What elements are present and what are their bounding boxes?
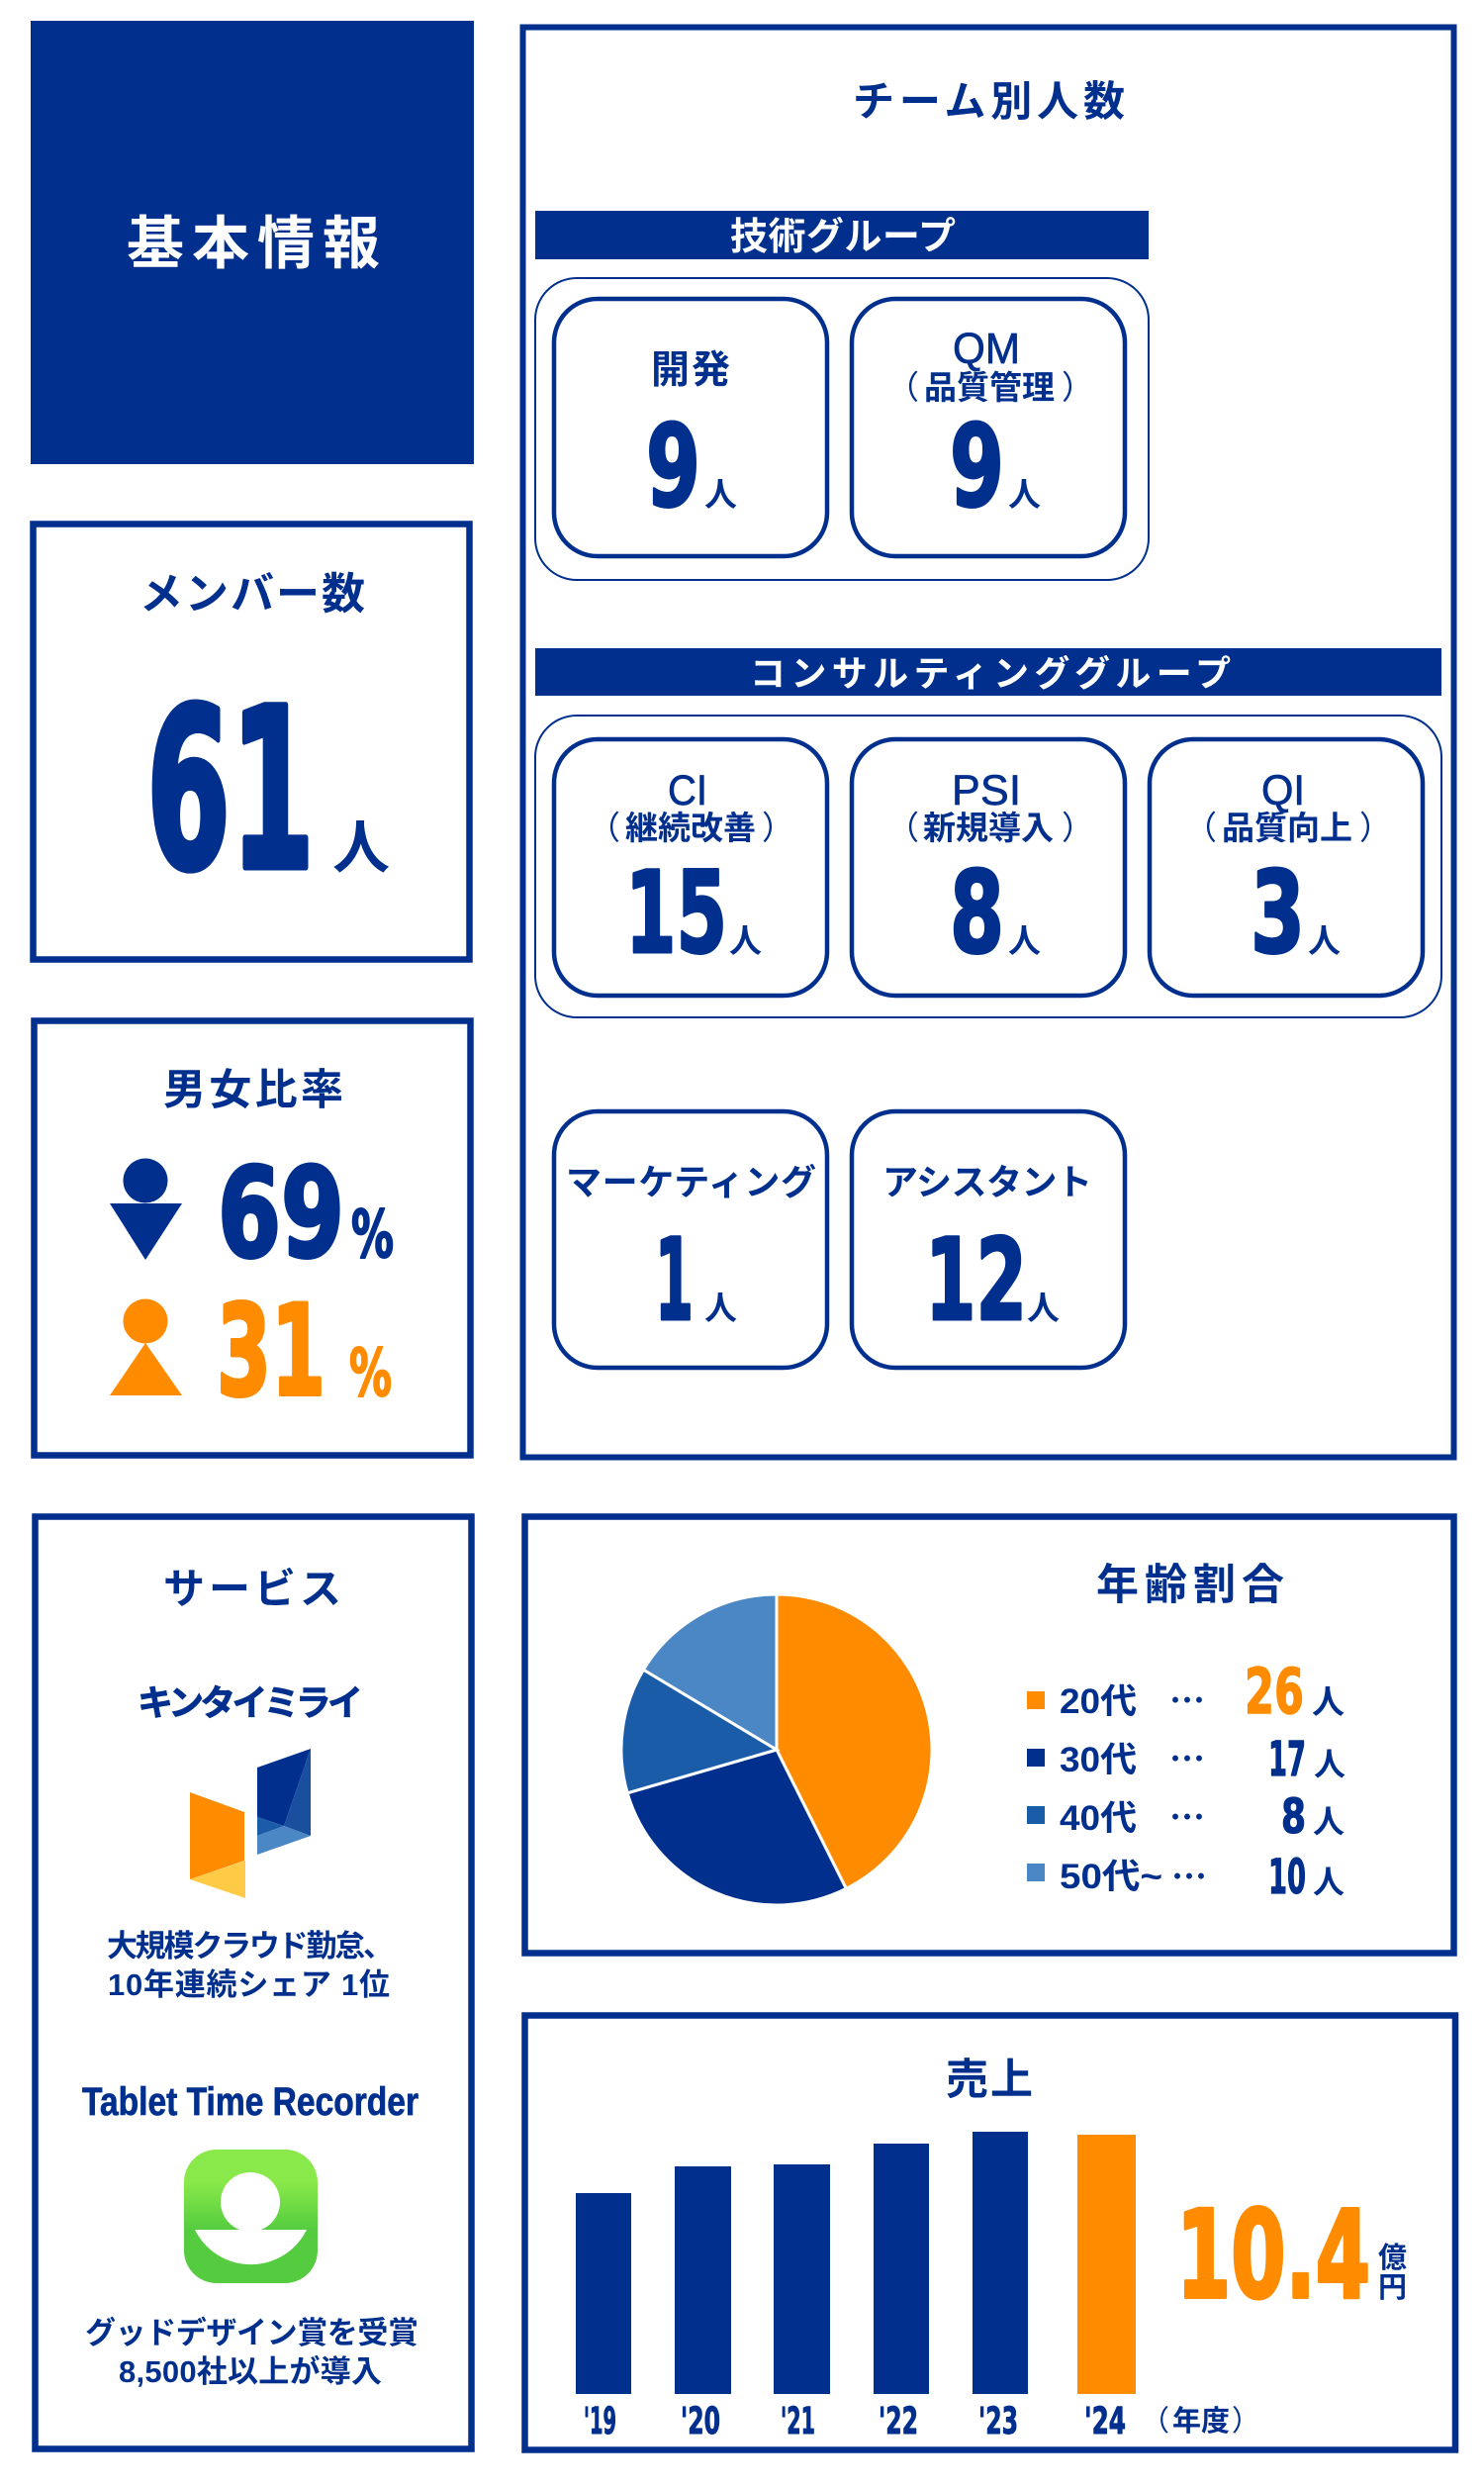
card: assistant (852, 1111, 1125, 1368)
legend row: 30s: 17 (1268, 1732, 1306, 1787)
heading: headcount by team: チーム別人数 (853, 78, 1125, 125)
legend row: 40s: 40代 (1060, 1799, 1137, 1838)
legend row: 20s: … (1169, 1673, 1205, 1724)
stat: sales 10.4 oku yen: 10.4 (1176, 2185, 1370, 2326)
service name: Tablet Time Recorder: Tablet Time Recorder (82, 2080, 418, 2124)
card: marketing: 1 (655, 1214, 694, 1346)
group outline: technology (535, 278, 1149, 580)
card: CI: ） (762, 810, 794, 846)
card: QM: QM (953, 325, 1020, 373)
axis labels: fiscal years (584, 2400, 1260, 2442)
card: PSI: 新規導入 (923, 810, 1054, 846)
card: assistant: 12 (925, 1214, 1027, 1346)
axis labels: fiscal years: '22 (879, 2400, 918, 2442)
text: KintaiMirai description (107, 1929, 394, 2002)
stat: sales 10.4 oku yen: 円 (1378, 2272, 1407, 2304)
heading: services: サービス (163, 1566, 341, 1612)
legend row: 30s: 30代 (1060, 1741, 1137, 1779)
card: CI (554, 739, 827, 996)
heading: gender ratio: 男女比率 (163, 1067, 343, 1114)
panel: headcount by team (522, 28, 1454, 1457)
card: CI: （ (588, 810, 620, 846)
stat: sales 10.4 oku yen: 億 (1378, 2242, 1407, 2274)
card: QI: 人 (1308, 922, 1341, 959)
legend row: 50s and over (1027, 1849, 1345, 1905)
text: KintaiMirai description: 10年連続シェア 1位 (108, 1967, 390, 2002)
icon: male (110, 1158, 182, 1260)
panel: sales (524, 2015, 1455, 2450)
card: QM: （ (886, 369, 919, 406)
card: QI: （ (1184, 810, 1217, 846)
card: QM: 人 (1008, 476, 1041, 513)
card: CI: 継続改善 (625, 810, 756, 846)
panel: header (31, 21, 474, 464)
card: PSI: PSI (952, 767, 1021, 814)
card: QM: ） (1062, 369, 1094, 406)
card: PSI: 8 (950, 847, 1004, 979)
legend row: 50s and over: … (1171, 1849, 1207, 1900)
stat: female 31%: 31 (217, 1278, 325, 1424)
group banner: technology (535, 211, 1149, 259)
legend row: 20s: 人 (1312, 1683, 1345, 1720)
card: QM: 9 (950, 401, 1004, 532)
panel: age ratio (524, 1516, 1454, 1954)
card: CI: 15 (625, 847, 727, 979)
icon: Tablet Time Recorder app (184, 2150, 318, 2283)
card: QI: 品質向上 (1222, 810, 1352, 846)
card: development (554, 299, 827, 556)
legend row: 30s: … (1169, 1731, 1205, 1782)
legend row: 40s: 8 (1281, 1789, 1306, 1845)
group banner: consulting: コンサルティンググループ (750, 653, 1231, 694)
legend row: 40s: … (1169, 1789, 1205, 1841)
group outline: consulting (535, 716, 1441, 1017)
card: QM: 品質管理 (924, 369, 1055, 406)
card: development: 開発 (651, 349, 730, 392)
legend row: 40s (1027, 1789, 1345, 1845)
legend row: 20s (1027, 1656, 1345, 1728)
card: QI: QI (1261, 767, 1305, 814)
pie chart: age ratio (621, 1594, 932, 1905)
heading: sales: 売上 (946, 2057, 1033, 2104)
service name: KintaiMirai: キンタイミライ (138, 1682, 363, 1723)
card: CI: 人 (729, 922, 762, 959)
title: 基本情報 (127, 212, 380, 276)
stat: male 69%: 69 (218, 1142, 344, 1286)
card: QM (852, 299, 1125, 556)
legend row: 50s and over: 10 (1268, 1850, 1306, 1905)
card: marketing: マーケティング (566, 1162, 816, 1202)
stat: 61 people: 人 (332, 816, 390, 881)
legend row: 50s and over: 50代~ (1060, 1858, 1162, 1896)
card: PSI (852, 739, 1125, 996)
text: Tablet Time Recorder description (85, 2316, 418, 2389)
stat: 61 people: 61 (146, 661, 315, 919)
card: QI: 3 (1251, 847, 1305, 979)
card: marketing (554, 1111, 827, 1368)
heading: age ratio: 年齢割合 (1096, 1562, 1284, 1609)
card: marketing: 人 (704, 1290, 737, 1326)
axis labels: fiscal years: ） (1232, 2406, 1260, 2438)
card: assistant: アシスタント (882, 1162, 1092, 1202)
card: PSI: 人 (1008, 922, 1041, 959)
text: KintaiMirai description: 大規模クラウド勤怠、 (107, 1929, 394, 1963)
card: development: 人 (704, 476, 737, 513)
legend row: 30s: 人 (1314, 1747, 1345, 1782)
stat: female 31%: % (349, 1335, 392, 1411)
stat: male 69%: % (351, 1197, 394, 1273)
card: PSI: ） (1062, 810, 1094, 846)
card: QI: ） (1359, 810, 1392, 846)
icon: female (110, 1298, 182, 1395)
text: Tablet Time Recorder description: グッドデザイン賞を受賞 (85, 2316, 418, 2350)
axis labels: fiscal years: 年度 (1172, 2405, 1230, 2438)
card: PSI: （ (886, 810, 919, 846)
panel: services (36, 1516, 471, 2448)
axis labels: fiscal years: '21 (781, 2400, 815, 2442)
axis labels: fiscal years: '19 (584, 2400, 616, 2442)
card: development: 9 (646, 401, 700, 532)
axis labels: fiscal years: '20 (681, 2400, 720, 2442)
panel: gender ratio (34, 1021, 471, 1455)
bar chart: sales by year (576, 2132, 1136, 2394)
legend row: 40s: 人 (1313, 1804, 1345, 1840)
icon: KintaiMirai logo (190, 1749, 311, 1898)
axis labels: fiscal years: '24 (1084, 2400, 1126, 2442)
text: Tablet Time Recorder description: 8,500社以上が導入 (119, 2354, 382, 2389)
heading: members: メンバー数 (139, 570, 365, 619)
legend row: 20s: 26 (1245, 1656, 1304, 1728)
axis labels: fiscal years: （ (1141, 2406, 1169, 2438)
card: QI (1150, 739, 1423, 996)
legend row: 30s (1027, 1731, 1345, 1787)
legend row: 50s and over: 人 (1313, 1865, 1345, 1900)
card: CI: CI (668, 767, 707, 814)
axis labels: fiscal years: '23 (978, 2400, 1018, 2442)
group banner: technology: 技術グループ (730, 217, 956, 258)
group banner: consulting (535, 648, 1441, 696)
panel: members (34, 525, 469, 960)
card: assistant: 人 (1027, 1290, 1060, 1326)
legend row: 20s: 20代 (1060, 1682, 1137, 1721)
